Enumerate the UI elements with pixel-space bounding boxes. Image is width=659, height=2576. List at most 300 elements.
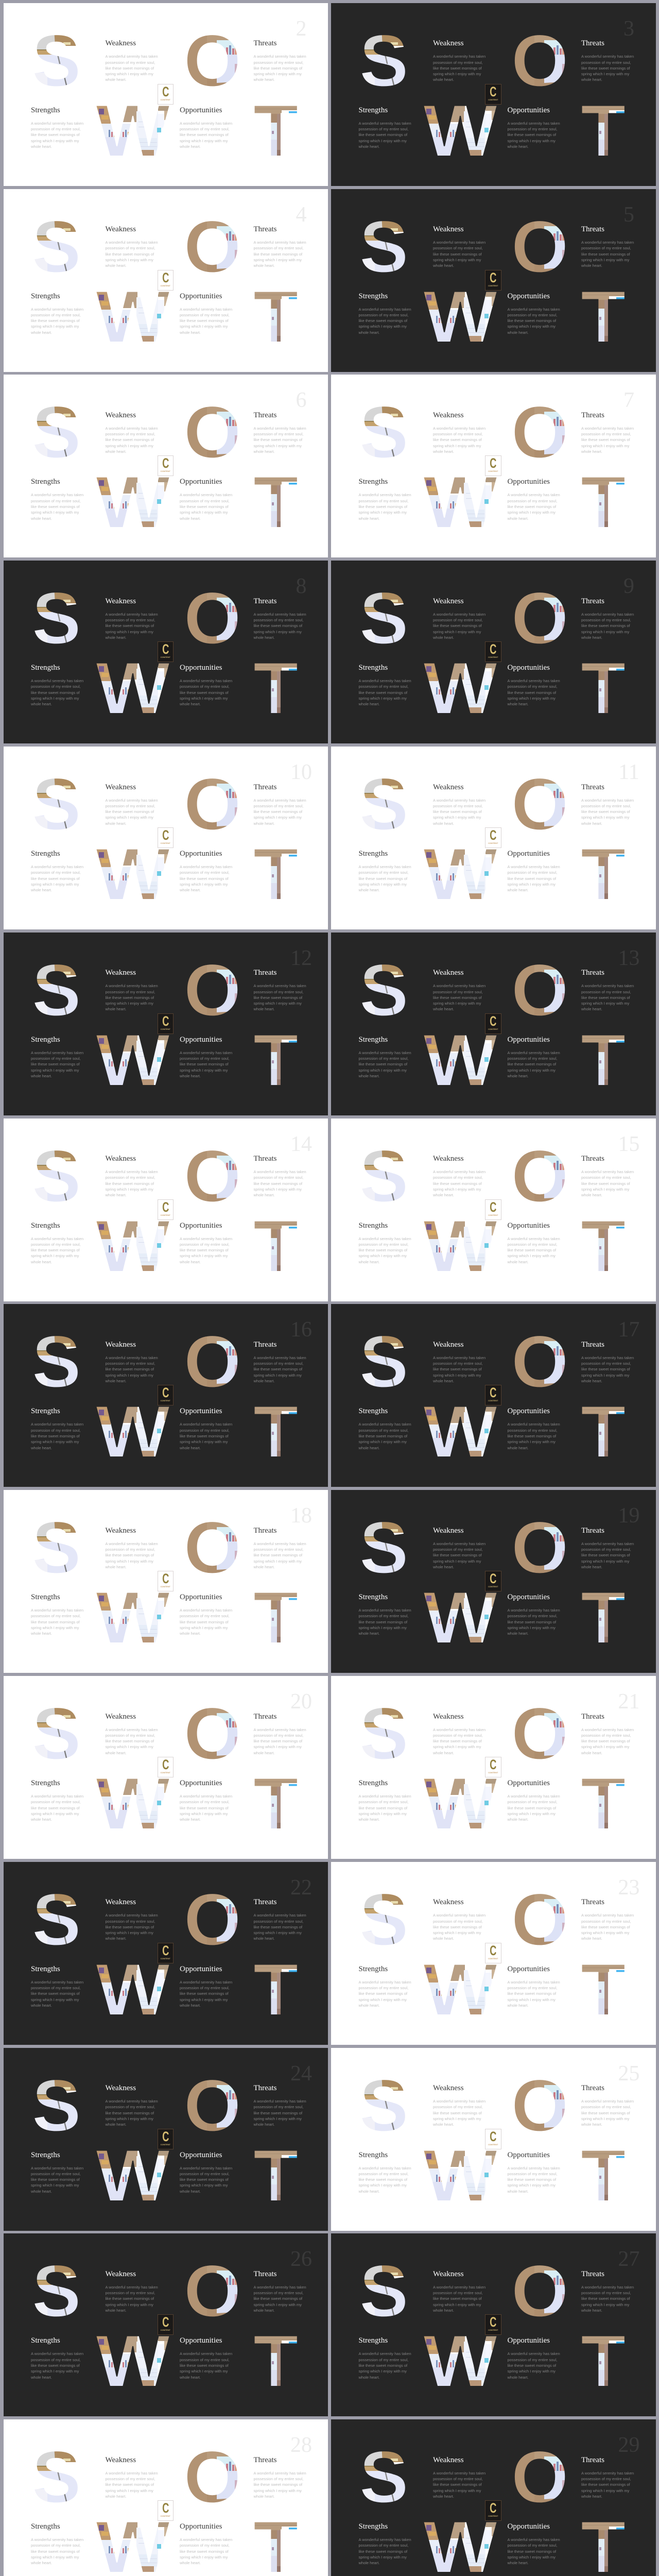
text: Opportunities: spring which I enjoy with my — [180, 2369, 228, 2374]
page number: 23 — [618, 1876, 639, 1900]
text: Weakness: like these sweet mornings of — [433, 2111, 482, 2115]
text: Weakness: spring which I enjoy with my — [105, 630, 153, 634]
text: Opportunities: A wonderful serenity has taken — [508, 679, 560, 683]
page number: 26 — [290, 2247, 312, 2271]
text: Weakness: A wonderful serenity has taken — [105, 612, 158, 617]
text: Threats: like these sweet mornings of — [253, 1367, 302, 1371]
logo badge — [158, 1943, 174, 1963]
text: Strengths — [31, 1050, 83, 1079]
text: Opportunities: possession of my entire soul, — [508, 2543, 557, 2548]
text: Weakness: A wonderful serenity has taken — [433, 54, 485, 59]
text: Threats: whole heart. — [581, 2122, 602, 2127]
text: Threats: like these sweet mornings of — [253, 1739, 302, 1743]
text: Threats: whole heart. — [253, 635, 274, 640]
logo badge: C — [490, 1757, 496, 1772]
text: Strengths: spring which I enjoy with my — [358, 1997, 407, 2002]
slide 27 — [331, 2233, 656, 2416]
text: Weakness: like these sweet mornings of — [105, 1925, 154, 1929]
letter S: S — [32, 950, 81, 1031]
text: Weakness — [105, 1169, 158, 1198]
logo badge: C — [162, 1943, 169, 1958]
letter S: S — [359, 392, 408, 473]
slide 9 — [331, 561, 656, 743]
text: Threats: whole heart. — [253, 263, 274, 268]
text: Weakness — [433, 2098, 485, 2128]
text: Weakness: A wonderful serenity has taken — [105, 1355, 158, 1360]
text: Opportunities: whole heart. — [508, 144, 528, 149]
text: Threats: possession of my entire soul, — [253, 1733, 303, 1738]
text: Strengths: spring which I enjoy with my — [31, 1253, 79, 1258]
heading: Strengths: Strengths — [31, 2151, 60, 2159]
text: Weakness: like these sweet mornings of — [433, 1553, 482, 1557]
logo badge — [158, 84, 174, 105]
text: Weakness: A wonderful serenity has taken — [433, 1913, 485, 1918]
slide 10 — [3, 747, 328, 929]
text: Weakness — [105, 1541, 158, 1570]
text: Strengths: whole heart. — [358, 1446, 379, 1450]
text: Opportunities: like these sweet mornings of — [508, 1991, 556, 1996]
text: Weakness: like these sweet mornings of — [105, 437, 154, 442]
logo badge: C — [490, 1013, 496, 1029]
text: Threats: A wonderful serenity has taken — [253, 2285, 306, 2290]
text: Opportunities: A wonderful serenity has taken — [508, 1422, 560, 1427]
text: Opportunities: A wonderful serenity has taken — [508, 121, 560, 126]
page number: 5 — [623, 203, 634, 227]
text: Opportunities: possession of my entire soul, — [508, 1800, 557, 1804]
text: Threats: whole heart. — [253, 1751, 274, 1755]
slide 18 — [3, 1490, 328, 1673]
text: Threats: A wonderful serenity has taken — [253, 1170, 306, 1174]
text: Weakness — [433, 798, 485, 826]
heading: Threats: Threats — [581, 1341, 604, 1349]
letter O: O — [183, 2065, 241, 2147]
text: Threats: whole heart. — [581, 1565, 602, 1569]
text: Threats: spring which I enjoy with my — [253, 1930, 302, 1935]
text: Opportunities: A wonderful serenity has taken — [180, 2166, 232, 2171]
letter T: T — [253, 1949, 298, 2031]
letter O: O — [183, 2436, 241, 2518]
text: Strengths: whole heart. — [31, 1817, 52, 1822]
text: Threats: possession of my entire soul, — [581, 1175, 631, 1180]
logo badge — [485, 641, 501, 662]
text: Strengths: possession of my entire soul, — [31, 1614, 81, 1618]
SWOT picture letters — [3, 2048, 327, 2231]
letter S: S — [359, 20, 408, 102]
heading: Strengths: Strengths — [31, 2336, 60, 2345]
letter T: T — [581, 1206, 626, 1287]
text: Strengths: A wonderful serenity has taken — [358, 1980, 411, 1985]
text: Threats — [581, 1912, 634, 1942]
text: Strengths: A wonderful serenity has taken — [31, 1980, 83, 1985]
heading: Opportunities: Opportunities — [180, 2522, 222, 2531]
text: Opportunities — [180, 307, 232, 335]
text: Weakness: like these sweet mornings of — [105, 1739, 154, 1743]
text: Threats: A wonderful serenity has taken — [253, 1541, 306, 1546]
heading: Strengths: Strengths — [31, 1036, 60, 1044]
text: Weakness: A wonderful serenity has taken — [433, 798, 485, 803]
slide 13 — [331, 933, 656, 1115]
heading: Opportunities: Opportunities — [508, 2522, 550, 2531]
text: Weakness: like these sweet mornings of — [433, 1181, 482, 1186]
text: Strengths: A wonderful serenity has taken — [358, 493, 411, 497]
text: Weakness: like these sweet mornings of — [105, 2111, 154, 2115]
text: Weakness: whole heart. — [433, 635, 454, 640]
text: Weakness: whole heart. — [433, 263, 454, 268]
text: Threats — [253, 54, 306, 82]
text: Weakness: like these sweet mornings of — [433, 1367, 482, 1371]
text: Weakness: possession of my entire soul, — [105, 432, 155, 436]
heading: Weakness: Weakness — [433, 1527, 464, 1535]
text: Threats: spring which I enjoy with my — [581, 1930, 629, 1935]
logo badge: CONTENT — [488, 842, 498, 844]
text: Weakness: like these sweet mornings of — [433, 437, 482, 442]
text: Opportunities: whole heart. — [180, 2375, 201, 2380]
text: Strengths: whole heart. — [358, 702, 379, 706]
text: Weakness: spring which I enjoy with my — [105, 1373, 153, 1378]
logo badge — [158, 1385, 174, 1405]
text: Threats: possession of my entire soul, — [253, 2291, 303, 2295]
text: Threats: A wonderful serenity has taken — [253, 1355, 306, 1360]
letter S: S — [359, 1507, 408, 1589]
letter T: T — [253, 2135, 298, 2217]
text: Threats: whole heart. — [581, 449, 602, 454]
letter T: T — [253, 834, 298, 916]
text: Weakness: whole heart. — [105, 1565, 126, 1569]
SWOT picture letters — [32, 206, 298, 358]
text: Threats — [581, 1727, 634, 1756]
text: Opportunities: whole heart. — [508, 1817, 528, 1822]
text: Weakness: whole heart. — [433, 2122, 454, 2127]
text: Strengths — [358, 1607, 411, 1637]
heading: Weakness: Weakness — [433, 597, 464, 605]
text: Strengths: A wonderful serenity has taken — [31, 1236, 83, 1241]
text: Strengths: spring which I enjoy with my — [358, 510, 407, 515]
logo badge: CONTENT — [488, 656, 498, 658]
logo badge: C — [490, 1199, 496, 1215]
text: Threats: possession of my entire soul, — [253, 1361, 303, 1366]
text: Opportunities — [180, 679, 232, 706]
text: Strengths: like these sweet mornings of — [358, 690, 407, 695]
text: Threats: like these sweet mornings of — [253, 66, 302, 71]
logo badge — [158, 641, 174, 662]
text: Opportunities: whole heart. — [508, 1260, 528, 1264]
text: Weakness: possession of my entire soul, — [105, 618, 155, 622]
letter T: T — [253, 2320, 298, 2402]
text: Strengths: like these sweet mornings of — [31, 1434, 80, 1438]
heading: Threats: Threats — [253, 411, 276, 419]
text: Opportunities: A wonderful serenity has taken — [508, 2351, 560, 2356]
heading: Opportunities: Opportunities — [180, 292, 222, 300]
text: Opportunities: spring which I enjoy with my — [508, 139, 556, 143]
text: Opportunities: spring which I enjoy with my — [508, 696, 556, 701]
text: Opportunities: possession of my entire soul, — [180, 1800, 230, 1804]
heading: Threats: Threats — [581, 411, 604, 419]
text: Strengths: like these sweet mornings of — [358, 1248, 407, 1252]
text: Weakness: spring which I enjoy with my — [433, 1001, 481, 1006]
text: Weakness: A wonderful serenity has taken — [433, 1355, 485, 1360]
text: Threats — [581, 1541, 634, 1570]
text: Weakness: A wonderful serenity has taken — [105, 1727, 158, 1732]
text: Weakness: whole heart. — [433, 1936, 454, 1941]
text: Strengths: spring which I enjoy with my — [31, 2183, 79, 2188]
letter S: S — [359, 764, 408, 845]
letter S: S — [359, 950, 408, 1031]
text: Opportunities — [180, 1236, 232, 1265]
logo badge — [485, 84, 501, 105]
text: Threats: spring which I enjoy with my — [253, 1187, 302, 1192]
text: Threats: A wonderful serenity has taken — [581, 1170, 634, 1174]
heading: Weakness: Weakness — [105, 783, 136, 791]
text: Threats: possession of my entire soul, — [581, 432, 631, 436]
letter O: O — [511, 578, 568, 659]
text: Weakness: possession of my entire soul, — [105, 2291, 155, 2295]
text: Opportunities: possession of my entire soul, — [180, 2172, 230, 2176]
page number: 15 — [618, 1132, 639, 1156]
slide 19 — [331, 1490, 656, 1673]
text: Threats: A wonderful serenity has taken — [581, 612, 634, 617]
text: Threats: possession of my entire soul, — [253, 432, 303, 436]
logo badge: CONTENT — [161, 1957, 170, 1960]
SWOT picture letters — [32, 392, 298, 544]
text: Opportunities: like these sweet mornings of — [508, 318, 556, 323]
text: Opportunities: A wonderful serenity has taken — [508, 1236, 560, 1241]
text: Opportunities: whole heart. — [508, 1446, 528, 1450]
logo badge — [158, 2314, 174, 2335]
SWOT picture letters — [331, 1676, 655, 1859]
text: Threats — [253, 2470, 306, 2499]
heading: Opportunities: Opportunities — [180, 850, 222, 858]
text: Strengths: whole heart. — [31, 1074, 52, 1078]
heading: Opportunities: Opportunities — [508, 478, 550, 486]
letter T: T — [581, 1949, 626, 2031]
text: Weakness: like these sweet mornings of — [433, 2296, 482, 2301]
heading: Strengths: Strengths — [31, 1593, 60, 1601]
page number: 11 — [618, 760, 639, 784]
text: Weakness — [105, 983, 158, 1012]
text: Threats: possession of my entire soul, — [581, 1733, 631, 1738]
heading: Strengths: Strengths — [31, 292, 60, 300]
heading: Opportunities: Opportunities — [180, 1407, 222, 1415]
letter W: W — [96, 834, 170, 916]
text: Strengths: possession of my entire soul, — [358, 499, 408, 503]
text: Strengths — [31, 493, 83, 521]
slide 6 — [3, 375, 328, 557]
text: Weakness: like these sweet mornings of — [433, 2482, 482, 2487]
text: Opportunities: like these sweet mornings of — [180, 2549, 229, 2554]
text: Strengths — [358, 1050, 411, 1079]
slide 4 — [3, 189, 328, 372]
letter W: W — [423, 2320, 497, 2402]
letter O: O — [183, 206, 241, 288]
text: Threats — [581, 240, 634, 268]
heading: Weakness: Weakness — [105, 411, 136, 419]
text: Threats: spring which I enjoy with my — [581, 444, 629, 448]
page number: 21 — [618, 1690, 639, 1714]
SWOT picture letters — [331, 2048, 655, 2231]
text: Weakness: A wonderful serenity has taken — [105, 54, 158, 59]
heading: Strengths: Strengths — [358, 1036, 388, 1044]
text: Opportunities: whole heart. — [180, 1817, 201, 1822]
page number: 12 — [290, 946, 312, 970]
letter S: S — [32, 392, 81, 473]
text: Threats — [581, 612, 634, 640]
slide 24 — [3, 2048, 328, 2231]
text: Threats: possession of my entire soul, — [253, 60, 303, 65]
text: Weakness: whole heart. — [433, 1751, 454, 1755]
text: Opportunities — [508, 679, 560, 706]
text: Threats: whole heart. — [253, 1379, 274, 1383]
page number: 27 — [618, 2247, 639, 2271]
SWOT picture letters — [331, 2419, 655, 2576]
text: Weakness: spring which I enjoy with my — [433, 72, 481, 76]
SWOT picture letters — [331, 2233, 655, 2416]
text: Threats: whole heart. — [581, 821, 602, 826]
text: Opportunities: possession of my entire soul, — [508, 1428, 557, 1433]
text: Weakness: A wonderful serenity has taken — [105, 2471, 158, 2476]
text: Strengths: possession of my entire soul, — [31, 1800, 81, 1804]
letter T: T — [581, 276, 626, 358]
heading: Weakness: Weakness — [105, 2084, 136, 2092]
text: Strengths: like these sweet mornings of — [31, 318, 80, 323]
text: Opportunities: possession of my entire soul, — [180, 127, 230, 131]
text: Opportunities: possession of my entire soul, — [508, 2172, 557, 2176]
text: Strengths: A wonderful serenity has taken — [31, 1050, 83, 1055]
text: Weakness: whole heart. — [433, 1193, 454, 1197]
text: Weakness: spring which I enjoy with my — [433, 1930, 481, 1935]
SWOT picture letters — [3, 747, 327, 929]
text: Opportunities — [508, 864, 560, 893]
heading: Weakness: Weakness — [433, 2456, 464, 2464]
letter W: W — [423, 648, 497, 730]
text: Opportunities: possession of my entire soul, — [180, 870, 230, 875]
text: Opportunities: whole heart. — [180, 1074, 201, 1078]
heading: Opportunities: Opportunities — [508, 1222, 550, 1230]
text: Weakness: A wonderful serenity has taken — [105, 1541, 158, 1546]
text: Weakness: whole heart. — [433, 77, 454, 82]
text: Opportunities: spring which I enjoy with my — [508, 1068, 556, 1073]
text: Strengths: spring which I enjoy with my — [31, 139, 79, 143]
text: Strengths: like these sweet mornings of — [31, 504, 80, 509]
text: Weakness: spring which I enjoy with my — [105, 72, 153, 76]
heading: Strengths: Strengths — [358, 1593, 388, 1601]
text: Opportunities: like these sweet mornings of — [508, 2177, 556, 2182]
text: Strengths: possession of my entire soul, — [31, 127, 81, 131]
heading: Strengths: Strengths — [31, 478, 60, 486]
heading: Threats: Threats — [581, 2270, 604, 2278]
text: Threats: possession of my entire soul, — [581, 1547, 631, 1552]
text: Weakness: possession of my entire soul, — [433, 1175, 483, 1180]
text: Weakness: spring which I enjoy with my — [105, 1187, 153, 1192]
heading: Opportunities: Opportunities — [508, 850, 550, 858]
text: Strengths: A wonderful serenity has taken — [31, 865, 83, 869]
SWOT picture letters — [3, 2419, 327, 2576]
heading: Threats: Threats — [581, 225, 604, 233]
text: Threats — [253, 2284, 306, 2313]
logo badge: C — [162, 2500, 169, 2516]
slide 14 — [3, 1118, 328, 1301]
text: Threats: spring which I enjoy with my — [253, 258, 302, 262]
text: Opportunities: like these sweet mornings of — [180, 2363, 229, 2368]
text: Strengths — [31, 1793, 83, 1822]
page number: 3 — [623, 17, 634, 41]
text: Strengths: spring which I enjoy with my — [358, 882, 407, 887]
text: Threats: spring which I enjoy with my — [253, 444, 302, 448]
text: Strengths: possession of my entire soul, — [31, 1242, 81, 1247]
text: Strengths: like these sweet mornings of — [358, 1620, 407, 1624]
logo badge: CONTENT — [161, 470, 170, 472]
text: Weakness: like these sweet mornings of — [105, 1181, 154, 1186]
letter W: W — [96, 1763, 170, 1845]
text: Threats — [253, 1355, 306, 1384]
text: Opportunities: A wonderful serenity has taken — [508, 865, 560, 869]
text: Threats — [253, 426, 306, 454]
text: Strengths — [31, 679, 83, 706]
text: Weakness: A wonderful serenity has taken — [433, 2099, 485, 2104]
text: Weakness: whole heart. — [105, 2308, 126, 2313]
text: Threats: like these sweet mornings of — [253, 2482, 302, 2487]
text: Opportunities — [508, 1793, 560, 1822]
text: Weakness: spring which I enjoy with my — [105, 815, 153, 820]
text: Opportunities: A wonderful serenity has taken — [180, 2351, 232, 2356]
text: Strengths — [358, 864, 411, 893]
text: Opportunities — [508, 2537, 560, 2566]
text: Weakness: like these sweet mornings of — [433, 1925, 482, 1929]
SWOT picture letters — [3, 933, 327, 1115]
logo badge: CONTENT — [161, 2515, 170, 2517]
text: Strengths: spring which I enjoy with my — [358, 1439, 407, 1444]
text: Opportunities — [180, 493, 232, 521]
text: Strengths: spring which I enjoy with my — [358, 1625, 407, 1630]
text: Threats: spring which I enjoy with my — [253, 2116, 302, 2121]
SWOT picture letters — [359, 20, 626, 172]
text: Weakness: whole heart. — [105, 1936, 126, 1941]
text: Opportunities: like these sweet mornings of — [508, 690, 556, 695]
text: Weakness: whole heart. — [433, 2308, 454, 2313]
text: Opportunities: whole heart. — [508, 2561, 528, 2565]
text: Opportunities — [180, 2537, 232, 2566]
text: Threats: A wonderful serenity has taken — [253, 2099, 306, 2104]
text: Strengths: A wonderful serenity has taken — [358, 865, 411, 869]
text: Opportunities: like these sweet mornings of — [508, 2363, 556, 2368]
text: Threats: possession of my entire soul, — [253, 2477, 303, 2481]
text: Opportunities: spring which I enjoy with my — [508, 324, 556, 329]
heading: Strengths: Strengths — [358, 1407, 388, 1415]
text: Weakness: A wonderful serenity has taken — [433, 2285, 485, 2290]
heading: Weakness: Weakness — [433, 1341, 464, 1349]
letter S: S — [32, 1136, 81, 1217]
letter O: O — [511, 20, 568, 102]
text: Opportunities — [508, 1236, 560, 1265]
text: Threats: whole heart. — [581, 263, 602, 268]
text: Opportunities: spring which I enjoy with my — [508, 1811, 556, 1816]
text: Weakness: A wonderful serenity has taken — [105, 798, 158, 803]
text: Threats: like these sweet mornings of — [253, 1181, 302, 1186]
text: Weakness: whole heart. — [433, 1565, 454, 1569]
letter W: W — [96, 1206, 170, 1287]
text: Strengths: possession of my entire soul, — [358, 684, 408, 689]
letter O: O — [183, 1507, 241, 1589]
letter W: W — [96, 462, 170, 544]
slide 26 — [3, 2233, 328, 2416]
text: Weakness: spring which I enjoy with my — [105, 1744, 153, 1749]
text: Strengths: whole heart. — [31, 702, 52, 706]
letter W: W — [423, 1020, 497, 1101]
text: Weakness: A wonderful serenity has taken — [433, 426, 485, 431]
text: Threats — [581, 983, 634, 1012]
text: Strengths: possession of my entire soul, — [31, 684, 81, 689]
text: Weakness: possession of my entire soul, — [433, 1919, 483, 1924]
text: Weakness: A wonderful serenity has taken — [433, 1170, 485, 1174]
